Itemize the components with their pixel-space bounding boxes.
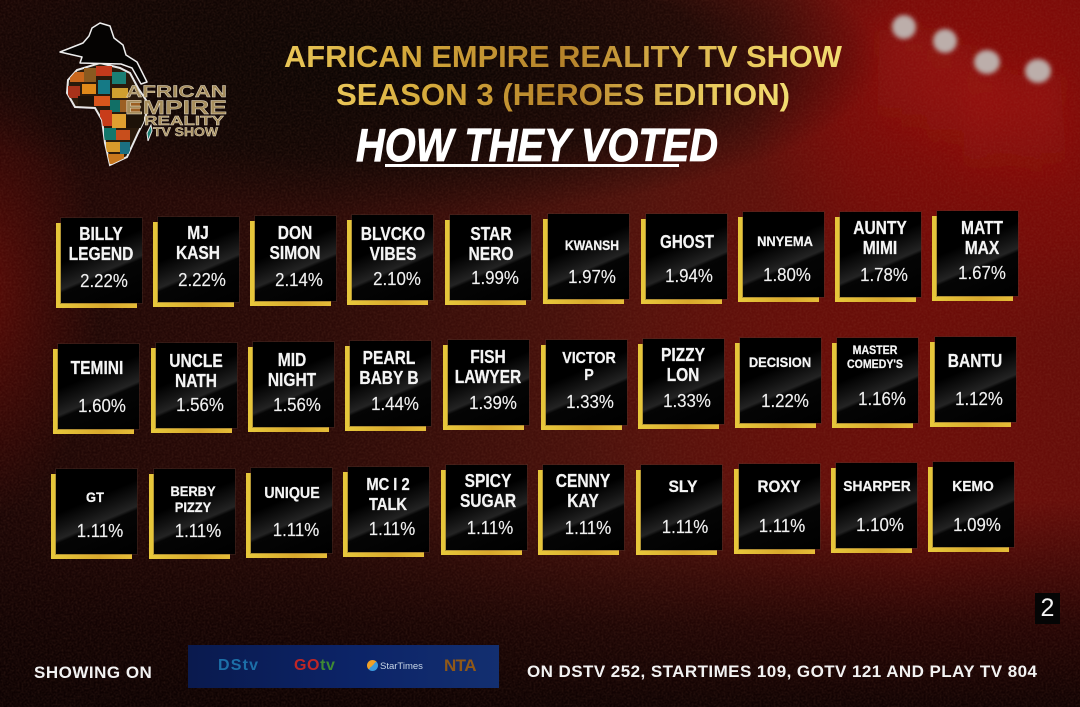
card: Kwansh: KWANSH xyxy=(565,237,619,253)
card: Sly: 1.11% xyxy=(662,516,708,537)
card: Master Comedy's: MASTER xyxy=(853,345,897,357)
heading: how they voted: HOW THEY VOTED xyxy=(356,119,718,171)
card: Sharper: 1.10% xyxy=(856,514,904,535)
card: Victor P: VICTOR xyxy=(562,350,616,367)
card: Sharper xyxy=(831,462,918,553)
card: Star Nero: STAR xyxy=(470,223,512,244)
card: Unique: 1.11% xyxy=(273,519,319,540)
card: Star Nero: 1.99% xyxy=(471,267,519,288)
icon: Africa map with pattern xyxy=(67,63,152,165)
card: Don Simon: SIMON xyxy=(270,242,320,263)
card: Don Simon: 2.14% xyxy=(275,269,323,290)
card: Cenny Kay xyxy=(538,464,625,555)
card: Victor P: 1.33% xyxy=(566,391,614,412)
card: Victor P xyxy=(541,339,628,430)
card: Temini: TEMINI xyxy=(71,357,123,378)
card: Matt Max xyxy=(932,210,1019,301)
card: Mid Night: NIGHT xyxy=(268,369,316,390)
card: Ghost: GHOST xyxy=(660,231,714,252)
card: Ghost: 1.94% xyxy=(665,265,713,286)
card: Spicy Sugar xyxy=(441,464,528,555)
card: Mid Night: 1.56% xyxy=(273,394,321,415)
card: Berby Pizzy: PIZZY xyxy=(175,499,211,515)
card: Roxy xyxy=(734,463,821,554)
card: Decision: DECISION xyxy=(749,354,811,370)
page number badge: 2 xyxy=(1041,594,1054,622)
card: Spicy Sugar: SUGAR xyxy=(460,490,516,511)
card: Spicy Sugar: SPICY xyxy=(465,470,511,491)
logo: GOtv: GOtv xyxy=(294,657,336,674)
broadcaster logos bar xyxy=(188,645,499,688)
title xyxy=(284,39,843,171)
card: Fish Lawyer xyxy=(443,339,530,430)
logo wordmark xyxy=(125,83,227,139)
card: Sly xyxy=(636,464,723,555)
card: Uncle Nath xyxy=(151,342,238,433)
card: GT: 1.11% xyxy=(77,520,123,541)
card: Billy Legend: 2.22% xyxy=(80,270,128,291)
card: Aunty Mimi xyxy=(835,211,922,302)
logo: NTA: NTA xyxy=(444,656,476,675)
card: Berby Pizzy xyxy=(149,468,236,559)
title line 2: SEASON 3 (HEROES EDITION) xyxy=(336,77,790,112)
card: Spicy Sugar: 1.11% xyxy=(467,517,513,538)
card: Mid Night xyxy=(248,341,335,432)
card: Blvcko Vibes: 2.10% xyxy=(373,268,421,289)
card: Master Comedy's: COMEDY'S xyxy=(847,359,903,371)
card: Don Simon xyxy=(250,215,337,306)
card: Star Nero xyxy=(445,214,532,305)
card: MC I 2 Talk: TALK xyxy=(369,494,407,514)
card: Berby Pizzy: BERBY xyxy=(170,483,216,499)
card: Kemo xyxy=(928,461,1015,552)
card: Pizzy Lon xyxy=(638,338,725,429)
logo wordmark: REALITY xyxy=(144,114,225,128)
card: GT xyxy=(51,468,138,559)
card: Uncle Nath: 1.56% xyxy=(176,394,224,415)
card: Pearl Baby B: PEARL xyxy=(363,347,415,368)
card: Uncle Nath: NATH xyxy=(175,370,217,391)
card: Berby Pizzy: 1.11% xyxy=(175,520,221,541)
card: Sharper: SHARPER xyxy=(843,478,911,495)
card: Blvcko Vibes xyxy=(347,214,434,305)
card: Sly: SLY xyxy=(668,477,697,496)
card: GT: GT xyxy=(86,489,104,505)
card: Star Nero: NERO xyxy=(469,243,513,264)
card: MJ Kash xyxy=(153,216,240,307)
card: Billy Legend: LEGEND xyxy=(69,243,133,264)
card: Billy Legend: BILLY xyxy=(79,223,123,244)
card: Temini xyxy=(53,343,140,434)
icon: silhouette figure xyxy=(60,23,147,84)
card: MJ Kash: KASH xyxy=(176,242,220,263)
card: Fish Lawyer: LAWYER xyxy=(455,366,521,387)
card: Roxy: ROXY xyxy=(757,478,801,496)
card: Decision xyxy=(735,337,822,428)
card: Matt Max: MAX xyxy=(965,237,999,258)
icon: Madagascar xyxy=(147,125,152,141)
card: Kwansh xyxy=(543,213,630,304)
card: Bantu: 1.12% xyxy=(955,388,1003,409)
card: Nnyema xyxy=(738,211,825,302)
card: Pearl Baby B: BABY B xyxy=(359,367,419,388)
card: Matt Max: MATT xyxy=(961,217,1003,238)
card: Bantu: BANTU xyxy=(948,350,1002,371)
logo: StarTimes: StarTimes xyxy=(380,661,423,672)
logo wordmark: TV SHOW xyxy=(153,125,219,139)
card: Ghost xyxy=(641,213,728,304)
card: Aunty Mimi: AUNTY xyxy=(853,217,907,238)
card: Unique: UNIQUE xyxy=(264,485,320,502)
card: Pizzy Lon: PIZZY xyxy=(661,344,705,365)
card: Fish Lawyer: 1.39% xyxy=(469,392,517,413)
card: Blvcko Vibes: VIBES xyxy=(370,243,416,264)
card: Roxy: 1.11% xyxy=(759,515,805,536)
page number badge xyxy=(1035,593,1060,624)
card: Master Comedy's xyxy=(832,337,919,428)
card: Master Comedy's: 1.16% xyxy=(858,388,906,409)
card: Cenny Kay: 1.11% xyxy=(565,517,611,538)
card: Pearl Baby B: 1.44% xyxy=(371,393,419,414)
logo: DStv: DStv xyxy=(218,657,259,674)
logo wordmark: AFRICAN xyxy=(126,83,227,101)
card: Unique xyxy=(246,467,333,558)
card: Don Simon: DON xyxy=(278,222,312,243)
card: MC I 2 Talk: 1.11% xyxy=(369,518,415,539)
card: Pizzy Lon: LON xyxy=(667,364,699,385)
card: Victor P: P xyxy=(584,367,594,384)
card: Aunty Mimi: 1.78% xyxy=(860,264,908,285)
card: MJ Kash: MJ xyxy=(187,222,209,243)
card: MC I 2 Talk xyxy=(343,466,430,557)
card: Blvcko Vibes: BLVCKO xyxy=(361,223,425,244)
card: MJ Kash: 2.22% xyxy=(178,269,226,290)
card: Billy Legend xyxy=(56,217,143,308)
card: Kwansh: 1.97% xyxy=(568,266,616,287)
card: Temini: 1.60% xyxy=(78,395,126,416)
footer label: showing on: SHOWING ON xyxy=(34,663,152,682)
card: MC I 2 Talk: MC I 2 xyxy=(366,474,410,494)
card: Cenny Kay: KAY xyxy=(567,490,599,511)
card: Pearl Baby B xyxy=(345,340,432,431)
card: Fish Lawyer: FISH xyxy=(470,346,506,367)
card: Kemo: KEMO xyxy=(952,478,994,495)
card: Uncle Nath: UNCLE xyxy=(169,350,223,371)
card: Cenny Kay: CENNY xyxy=(556,470,610,491)
card: Mid Night: MID xyxy=(278,349,306,370)
logo: African Empire Reality TV Show xyxy=(59,22,227,166)
title line 1: AFRICAN EMPIRE REALITY TV SHOW xyxy=(284,39,843,74)
card: Nnyema: 1.80% xyxy=(763,264,811,285)
card: Aunty Mimi: MIMI xyxy=(863,237,897,258)
card: Nnyema: NNYEMA xyxy=(757,233,813,249)
card: Decision: 1.22% xyxy=(761,390,809,411)
card: Matt Max: 1.67% xyxy=(958,262,1006,283)
footer channels text: ON DSTV 252, STARTIMES 109, GOTV 121 AND PLAY TV 804 xyxy=(527,662,1037,681)
logo wordmark: EMPIRE xyxy=(125,98,227,119)
card: Bantu xyxy=(930,336,1017,427)
card: Pizzy Lon: 1.33% xyxy=(663,390,711,411)
card: Kemo: 1.09% xyxy=(953,514,1001,535)
